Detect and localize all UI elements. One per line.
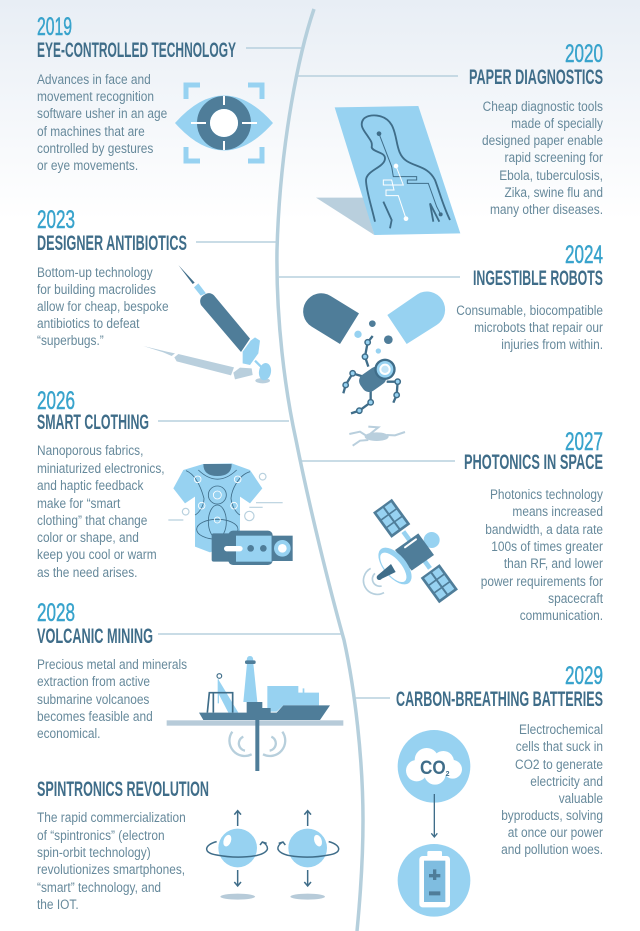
section: 2027 photonics in space: communication. xyxy=(520,607,603,623)
section: 2026 smart clothing: clothing” that change xyxy=(37,512,147,528)
section: 2028 volcanic mining: submarine volcanoes xyxy=(37,691,150,707)
section: 2020 paper diagnostics xyxy=(469,40,604,217)
icon: spinning electrons xyxy=(207,811,339,900)
section: spintronics revolution: the IOT. xyxy=(37,896,79,912)
section: 2020 paper diagnostics: designed paper enable xyxy=(482,132,603,148)
section: 2026 smart clothing: and haptic feedback xyxy=(37,477,144,493)
section: 2027 photonics in space: power requirements for xyxy=(481,573,604,589)
section: 2028 volcanic mining: extraction from active xyxy=(37,673,150,689)
icon: eye xyxy=(175,85,273,161)
section: 2027 photonics in space: spacecraft xyxy=(548,590,603,606)
section: 2024 ingestible robots: injuries from within. xyxy=(501,336,603,352)
section: spintronics revolution: of “spintronics” (electron xyxy=(37,827,165,843)
section: 2027 photonics in space: means increased xyxy=(512,503,603,519)
section: 2029 carbon-breathing batteries: CO2 to generate xyxy=(515,756,603,772)
section: 2026 smart clothing: make for “smart xyxy=(37,495,121,511)
section: spintronics revolution xyxy=(37,778,209,912)
section: 2023 designer antibiotics: “superbugs.” xyxy=(37,332,104,348)
section: 2028 volcanic mining: economical. xyxy=(37,725,100,741)
icon: CO2 cloud and battery: CO xyxy=(420,758,446,779)
section: 2023 designer antibiotics: 2023 xyxy=(37,206,75,234)
section: 2028 volcanic mining: Precious metal and minerals xyxy=(37,656,188,672)
icon: CO2 cloud and battery: 2 xyxy=(446,771,450,778)
connector lines xyxy=(158,48,460,698)
section: 2020 paper diagnostics: Zika, swine flu and xyxy=(504,184,603,200)
section: 2028 volcanic mining: becomes feasible and xyxy=(37,708,153,724)
section: 2019 eye-controlled technology: or eye movements. xyxy=(37,157,138,173)
section: 2023 designer antibiotics xyxy=(37,206,187,348)
section: 2019 eye-controlled technology xyxy=(37,13,236,173)
icon: smart shirt and belt xyxy=(168,463,293,565)
section: spintronics revolution: SPINTRONICS REVOLUTION xyxy=(37,778,209,801)
section: 2019 eye-controlled technology: 2019 xyxy=(37,13,72,41)
section: 2028 volcanic mining: VOLCANIC MINING xyxy=(37,625,153,648)
section: 2023 designer antibiotics: for building macrolides xyxy=(37,281,156,297)
section: 2020 paper diagnostics: rapid screening for xyxy=(504,149,604,165)
section: 2023 designer antibiotics: allow for cheap, bespoke xyxy=(37,298,169,314)
section: 2020 paper diagnostics: Cheap diagnostic tools xyxy=(483,98,603,114)
section: 2029 carbon-breathing batteries: at once our power xyxy=(508,824,604,840)
icon: paper diagnostic body xyxy=(316,106,460,235)
section: 2019 eye-controlled technology: EYE-CONTROLLED TECHNOLOGY xyxy=(37,39,236,62)
section: 2029 carbon-breathing batteries: electricity and xyxy=(530,773,603,789)
section: 2027 photonics in space: bandwidth, a data rate xyxy=(485,521,603,537)
section: 2029 carbon-breathing batteries: and pollution woes. xyxy=(501,841,603,857)
section: 2024 ingestible robots: 2024 xyxy=(565,241,603,269)
section: spintronics revolution: revolutionizes smartphones, xyxy=(37,861,185,877)
section: 2029 carbon-breathing batteries xyxy=(396,662,604,857)
section: 2020 paper diagnostics: many other diseases. xyxy=(490,201,603,217)
icon: satellite xyxy=(363,499,458,603)
section: 2019 eye-controlled technology: movement recognition xyxy=(37,88,154,104)
section: 2026 smart clothing: keep you cool or warm xyxy=(37,546,157,562)
section: 2027 photonics in space: 2027 xyxy=(565,428,603,456)
timeline curve xyxy=(277,9,363,931)
section: 2019 eye-controlled technology: Advances in face and xyxy=(37,71,151,87)
section: 2026 smart clothing: color or shape, and xyxy=(37,529,139,545)
section: 2019 eye-controlled technology: controlled by gestures xyxy=(37,140,154,156)
section: 2029 carbon-breathing batteries: 2029 xyxy=(565,662,603,690)
section: spintronics revolution: “smart” technology, and xyxy=(37,879,161,895)
section: 2019 eye-controlled technology: of machines that are xyxy=(37,123,145,139)
section: 2020 paper diagnostics: made of specially xyxy=(511,115,603,131)
section: 2024 ingestible robots: Consumable, biocompatible xyxy=(456,302,603,318)
icon: syringe xyxy=(143,265,272,383)
section: 2026 smart clothing: as the need arises. xyxy=(37,564,137,580)
section: 2028 volcanic mining xyxy=(37,599,188,741)
section: 2026 smart clothing: miniaturized electronics, xyxy=(37,460,165,476)
section: spintronics revolution: The rapid commercialization xyxy=(37,809,186,825)
section: 2024 ingestible robots: microbots that repair our xyxy=(474,319,604,335)
section: 2026 smart clothing: 2026 xyxy=(37,387,75,415)
section: 2028 volcanic mining: 2028 xyxy=(37,599,75,627)
section: 2029 carbon-breathing batteries: valuable xyxy=(559,790,603,806)
section: 2027 photonics in space: 100s of times greater xyxy=(491,538,604,554)
section: 2023 designer antibiotics: DESIGNER ANTIBIOTICS xyxy=(37,232,187,255)
section: 2019 eye-controlled technology: software usher in an age xyxy=(37,105,167,121)
section: 2026 smart clothing: Nanoporous fabrics, xyxy=(37,442,143,458)
section: 2024 ingestible robots xyxy=(456,241,604,352)
section: 2020 paper diagnostics: 2020 xyxy=(565,40,603,68)
icon: CO2 cloud and battery xyxy=(398,730,470,917)
icon: mining ship xyxy=(167,656,343,771)
section: 2029 carbon-breathing batteries: byproducts, solving xyxy=(501,807,603,823)
section: 2029 carbon-breathing batteries: cells that suck in xyxy=(516,738,603,754)
section: 2027 photonics in space: Photonics technology xyxy=(490,486,603,502)
section: 2023 designer antibiotics: Bottom-up technology xyxy=(37,264,153,280)
section: 2026 smart clothing xyxy=(37,387,165,580)
section: 2020 paper diagnostics: Ebola, tuberculosis, xyxy=(499,167,603,183)
section: spintronics revolution: spin-orbit technology) xyxy=(37,844,151,860)
section: 2023 designer antibiotics: antibiotics to defeat xyxy=(37,315,140,331)
section: 2026 smart clothing: SMART CLOTHING xyxy=(37,411,149,434)
section: 2029 carbon-breathing batteries: Electrochemical xyxy=(519,721,603,737)
icon: capsule and microbot xyxy=(303,292,445,446)
section: 2027 photonics in space: than RF, and lower xyxy=(504,555,604,571)
section: 2027 photonics in space xyxy=(464,428,604,623)
